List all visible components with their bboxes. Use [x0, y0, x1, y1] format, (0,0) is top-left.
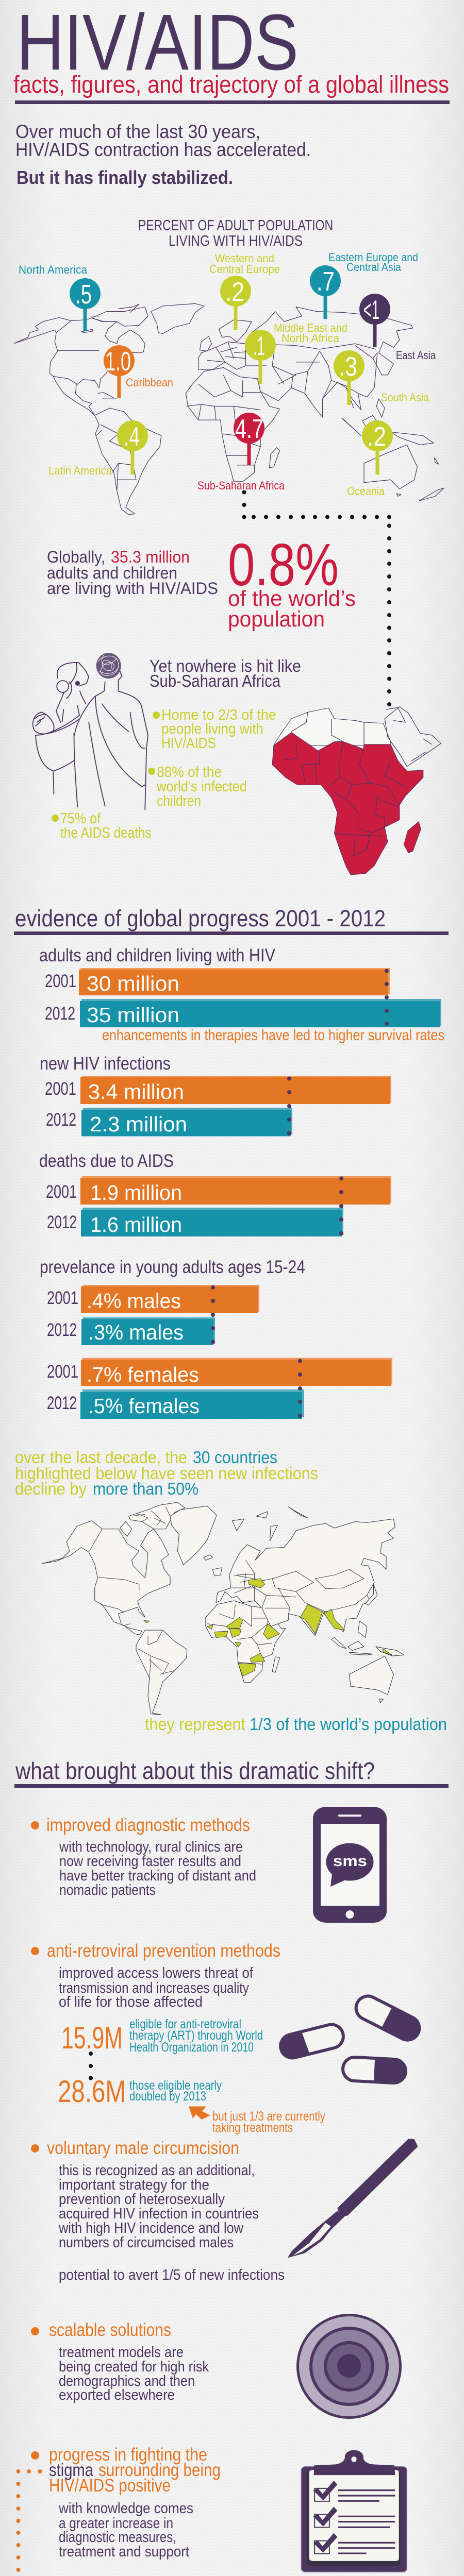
illustration: mother, baby and man	[33, 653, 148, 810]
callout: 0.8% of the world's population: 0.8%	[228, 531, 339, 598]
chart: new HIV infections	[40, 1054, 391, 1137]
pin: Latin America	[117, 420, 148, 474]
map caption: 1/3 of the world’s population	[250, 1715, 447, 1734]
section heading: what brought about this dramatic shift: what brought about this dramatic shift?	[15, 1757, 375, 1784]
pin: South Asia	[334, 350, 364, 405]
panel: progress in fighting the stigma: progress in fighting the	[49, 2445, 207, 2465]
bullet: 75% of AIDS deaths: the AIDS deaths	[60, 825, 152, 841]
header	[13, 0, 450, 104]
decline text: over the last decade, the	[15, 1448, 187, 1467]
panel: progress in fighting the stigma: diagnostic measures,	[59, 2529, 176, 2546]
global statistic text	[47, 548, 218, 598]
panel: scalable solutions	[31, 2320, 209, 2403]
pin: Western and Central Europe	[220, 276, 251, 330]
chart: new HIV infections: 2001	[45, 1079, 76, 1099]
map heading: PERCENT OF ADULT POPULATION	[138, 217, 333, 234]
map caption: they represent	[145, 1715, 245, 1734]
pin: Caribbean	[104, 345, 135, 398]
statistic: eligible for therapy: 28.6M	[58, 2074, 126, 2109]
bullet: 75% of AIDS deaths: 75% of	[60, 810, 101, 827]
map region labels: South Asia	[381, 391, 429, 404]
chart: deaths due to AIDS: 1.9 million	[90, 1181, 182, 1205]
icon: clipboard checklist	[301, 2450, 407, 2572]
panel: scalable solutions: being created for high risk	[59, 2359, 209, 2375]
panel: progress in fighting the stigma	[31, 2445, 221, 2560]
panel: scalable solutions: treatment models are	[59, 2344, 184, 2361]
chart: prevalence in young adults: 2012	[47, 1393, 77, 1413]
map: Africa with sub-Saharan region in red	[272, 707, 441, 875]
chart: deaths due to AIDS: 2001	[46, 1182, 77, 1202]
map region labels: Eastern Europe and	[328, 251, 418, 264]
panel: voluntary male circumcision: with high HIV incidence and low	[58, 2220, 244, 2236]
pin: Latin America: .4	[124, 422, 140, 452]
pin: Oceania: .2	[367, 422, 386, 452]
map region labels: Oceania	[347, 485, 385, 498]
bullet: home to 2/3: people living with	[161, 721, 263, 737]
chart: prevalence in young adults: .5% females	[88, 1394, 200, 1418]
map region labels: Latin America	[48, 464, 112, 477]
statistic: eligible for therapy: eligible for anti-retroviral	[129, 2017, 241, 2031]
chart: adults and children living with HIV: 2012	[45, 1004, 75, 1024]
bullet: 88% of infected children: children	[157, 793, 201, 809]
panel: progress in fighting the stigma: treatment and support	[59, 2544, 189, 2560]
map region labels: Western and	[215, 252, 274, 265]
panel: progress in fighting the stigma: stigma	[49, 2460, 93, 2480]
panel: anti-retroviral prevention methods: anti-retroviral prevention methods	[47, 1941, 280, 1961]
pin: Middle East and North Africa	[245, 330, 276, 384]
chart: deaths due to AIDS: 2012	[47, 1212, 77, 1232]
global statistic text: adults and children	[47, 564, 177, 582]
bullet: 75% of AIDS deaths	[52, 810, 152, 841]
decline text	[15, 1448, 318, 1498]
icon: phone with sms bubble: sms	[333, 1853, 367, 1870]
chart: new HIV infections: 3.4 million	[88, 1080, 184, 1104]
callout: 0.8% of the world's population: population	[228, 607, 325, 632]
intro text	[15, 121, 311, 188]
panel: improved diagnostic methods: with technology, rural clinics are	[59, 1839, 243, 1855]
statistic: eligible for therapy: 15.9M	[61, 2021, 123, 2055]
chart: deaths due to AIDS	[39, 1151, 391, 1236]
chart: adults and children living with HIV: 35 million	[87, 1003, 179, 1027]
decline text: highlighted below have seen new infections	[15, 1464, 318, 1483]
intro text: Over much of the last 30 years,	[15, 121, 260, 142]
chart: prevalence in young adults	[40, 1257, 392, 1419]
map region labels: Sub-Saharan Africa	[197, 479, 285, 492]
panel: progress in fighting the stigma: a greater increase in	[59, 2515, 173, 2532]
panel: voluntary male circumcision: this is recognized as an additional,	[59, 2162, 255, 2179]
dotted connector: Sub-Saharan Africa to Africa map	[242, 490, 391, 706]
pin: Sub-Saharan Africa	[234, 413, 264, 465]
panel: scalable solutions: exported elsewhere	[59, 2387, 175, 2403]
pin: North America: .5	[75, 280, 92, 310]
decline text: decline by	[15, 1479, 87, 1498]
global statistic text: Globally,	[47, 548, 105, 566]
bullet: 88% of infected children	[148, 764, 247, 809]
panel: voluntary male circumcision: important strategy for the	[59, 2177, 209, 2193]
chart: new HIV infections: 2.3 million	[90, 1112, 187, 1136]
panel: voluntary male circumcision	[31, 2138, 285, 2283]
pin: North America	[70, 278, 101, 331]
panel: progress in fighting the stigma: with knowledge comes	[58, 2500, 193, 2517]
decline text: more than 50%	[93, 1479, 198, 1498]
map region labels: Central Europe	[209, 263, 280, 276]
map region labels	[19, 251, 436, 498]
panel: voluntary male circumcision: prevention of heterosexually	[59, 2191, 225, 2208]
arrow and note: just 1/3 on treatment: but just 1/3 are currently	[212, 2109, 325, 2124]
map region labels: East Asia	[396, 349, 436, 362]
chart: prevalence in young adults: 2001	[47, 1362, 78, 1382]
panel: voluntary male circumcision: acquired HIV infection in countries	[59, 2206, 259, 2222]
callout: 0.8% of the world's population: of the world’s	[228, 586, 356, 611]
panel: improved diagnostic methods: improved diagnostic methods	[46, 1815, 250, 1835]
panel: improved diagnostic methods: nomadic patients	[59, 1882, 156, 1899]
chart: adults and children living with HIV: adults and children living with HIV	[39, 945, 276, 965]
intro text: HIV/AIDS contraction has accelerated.	[15, 139, 311, 160]
decline text: 30 countries	[193, 1448, 277, 1467]
section heading: evidence of global progress: evidence of global progress 2001 - 2012	[15, 905, 386, 931]
chart: prevalence in young adults: .4% males	[87, 1289, 181, 1313]
chart: prevalence in young adults: 2012	[47, 1320, 77, 1340]
chart: prevalence in young adults: .7% females	[87, 1363, 199, 1386]
panel: anti-retroviral prevention methods: improved access lowers threat of	[59, 1965, 254, 1981]
title: HIV/AIDS	[16, 0, 299, 87]
statistic: eligible for therapy: Health Organization in 2010	[129, 2040, 254, 2055]
map region labels: North America	[19, 263, 88, 276]
pin: Eastern Europe and Central Asia	[310, 265, 341, 319]
chart: deaths due to AIDS: 1.6 million	[90, 1213, 182, 1236]
panel: anti-retroviral prevention methods	[31, 1941, 280, 2010]
world map: countries with declining infections	[42, 1502, 404, 1715]
statistic: eligible for therapy: therapy (ART) through World	[129, 2028, 263, 2043]
statistic: eligible for therapy	[58, 2017, 263, 2109]
pin: Sub-Saharan Africa: 4.7	[235, 414, 263, 444]
bullet: 88% of infected children: 88% of the	[157, 764, 222, 781]
map region labels: Middle East and	[274, 321, 347, 334]
global statistic text: are living with HIV/AIDS	[47, 579, 218, 598]
Sub-Saharan Africa text: Sub-Saharan Africa	[150, 671, 281, 690]
world map outline	[14, 303, 444, 515]
chart: prevalence in young adults: .3% males	[88, 1320, 184, 1344]
icon: phone with sms bubble	[313, 1807, 387, 1923]
pin: Oceania	[362, 420, 393, 474]
panel: scalable solutions: scalable solutions	[49, 2320, 171, 2340]
chart: new HIV infections: new HIV infections	[40, 1054, 171, 1074]
pin: South Asia: .3	[339, 352, 357, 382]
panel: voluntary male circumcision: potential to avert 1/5 of new infections	[59, 2267, 285, 2283]
icon: target	[296, 2314, 402, 2419]
chart: adults and children living with HIV: 30 million	[87, 972, 179, 995]
pin: Caribbean: 1.0	[105, 347, 131, 377]
bullet: home to 2/3	[153, 707, 276, 752]
pin: East Asia: <1	[363, 295, 379, 325]
dotted connector: stigma to opinion polls	[16, 2469, 53, 2576]
panel: progress in fighting the stigma: HIV/AIDS positive	[49, 2476, 171, 2496]
panel: improved diagnostic methods	[31, 1815, 256, 1899]
panel: improved diagnostic methods: have better tracking of distant and	[59, 1868, 256, 1884]
statistic: eligible for therapy: doubled by 2013	[129, 2089, 206, 2104]
panel: anti-retroviral prevention methods: of life for those affected	[59, 1994, 203, 2010]
panel: anti-retroviral prevention methods: transmission and increases quality	[59, 1980, 249, 1996]
chart: prevalence in young adults: 2001	[47, 1288, 78, 1308]
global statistic text: 35.3 million	[111, 548, 190, 566]
map region labels: Central Asia	[346, 261, 402, 274]
bullet: home to 2/3: Home to 2/3 of the	[161, 707, 276, 723]
map heading: LIVING WITH HIV/AIDS	[169, 233, 303, 249]
panel: voluntary male circumcision: voluntary male circumcision	[47, 2138, 239, 2158]
statistic: eligible for therapy: those eligible nearly	[129, 2078, 222, 2093]
panel: improved diagnostic methods: now receiving faster results and	[59, 1853, 241, 1870]
arrow and note: just 1/3 on treatment: taking treatments	[212, 2121, 293, 2135]
map region labels: North Africa	[281, 332, 340, 345]
pin: Eastern Europe and Central Asia: .7	[317, 267, 335, 297]
panel: scalable solutions: demographics and then	[59, 2373, 195, 2389]
icon: scalpel	[288, 2139, 418, 2258]
chart: new HIV infections: 2012	[46, 1110, 76, 1130]
map caption	[145, 1715, 447, 1734]
pin: East Asia	[359, 294, 390, 347]
chart: adults and children living with HIV	[39, 945, 444, 1044]
panel: voluntary male circumcision: numbers of circumcised males	[59, 2234, 234, 2251]
bullet: 88% of infected children: world’s infected	[156, 778, 247, 795]
bullet: home to 2/3: HIV/AIDS	[161, 735, 216, 752]
pin: Middle East and North Africa: .1	[253, 331, 265, 361]
arrow and note: just 1/3 on treatment	[189, 2106, 325, 2135]
chart: deaths due to AIDS: deaths due to AIDS	[39, 1151, 174, 1171]
Sub-Saharan Africa text: Yet nowhere is hit like	[150, 656, 301, 675]
pin: Western and Central Europe: .2	[225, 277, 244, 307]
panel: progress in fighting the stigma: surrounding being	[98, 2460, 221, 2480]
chart: prevalence in young adults: prevelance in young adults ages 15-24	[40, 1257, 305, 1277]
Sub-Saharan Africa text	[150, 656, 301, 690]
map region labels: Caribbean	[126, 376, 173, 389]
intro text: But it has finally stabilized.	[16, 167, 233, 188]
icon: pills	[278, 1992, 423, 2083]
map heading	[138, 217, 333, 249]
header rule	[15, 100, 450, 104]
chart: adults and children living with HIV: 2001	[45, 971, 76, 991]
callout: 0.8% of the world's population	[228, 531, 356, 632]
